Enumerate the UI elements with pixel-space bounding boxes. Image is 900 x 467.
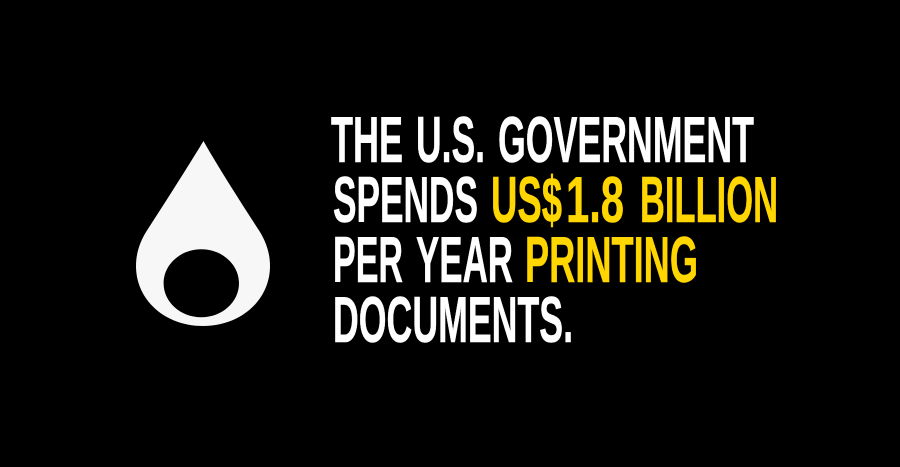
- line 4: documents: DOCUMENTS.: [333, 283, 573, 356]
- line 2: spends US$1.8 billion: BILLION: [640, 163, 778, 236]
- line 3: per year printing: YEAR: [416, 223, 513, 296]
- line 3: per year printing: [333, 223, 698, 296]
- line 1: The U.S. Government: [331, 103, 754, 176]
- headline text: [331, 103, 778, 356]
- line 2: spends US$1.8 billion: [333, 163, 778, 236]
- line 1: The U.S. Government: U.S.: [416, 103, 485, 176]
- line 2: spends US$1.8 billion: 1.8: [566, 163, 624, 236]
- icon: ink drop: [136, 141, 270, 326]
- line 2: spends US$1.8 billion: US$: [491, 163, 562, 236]
- line 2: spends US$1.8 billion: SPENDS: [333, 163, 478, 236]
- line 3: per year printing: PRINTING: [525, 223, 698, 296]
- line 3: per year printing: PER: [333, 223, 403, 296]
- line 1: The U.S. Government: THE: [331, 103, 403, 176]
